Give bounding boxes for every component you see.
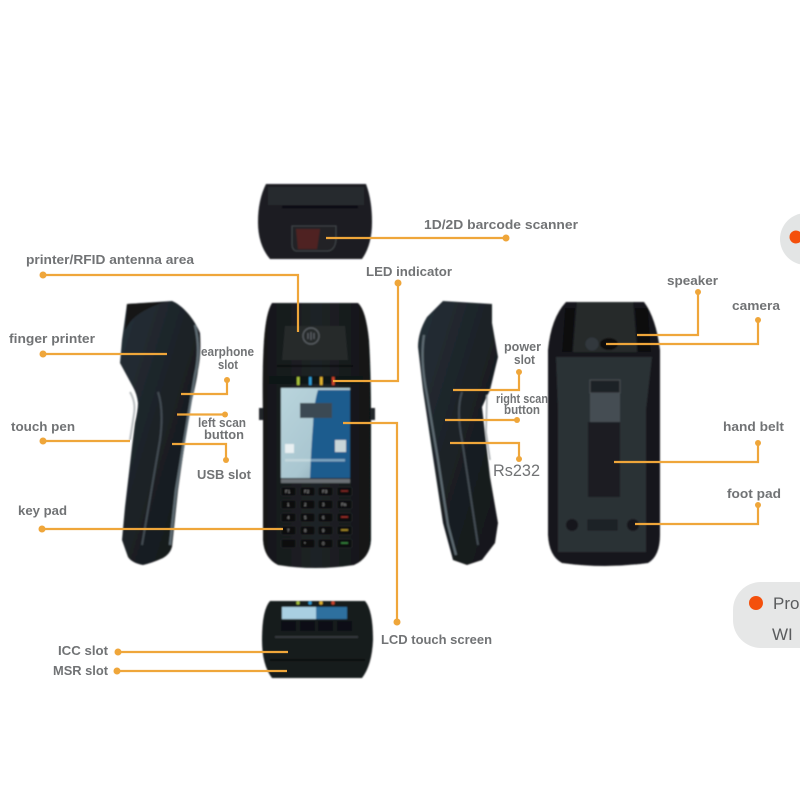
label: touch pen: touch pen [11,420,75,434]
label: 1D/2D barcode scanner: 1D/2D barcode scanner [424,218,578,232]
label: Rs232: Rs232 [493,461,540,480]
label: LED indicator: LED indicator [366,265,452,279]
label: USB slot: USB slot [197,468,252,482]
label: power slot [453,340,541,390]
label: LED indicator [333,265,452,381]
label: left scan button [177,412,246,442]
label: key pad: key pad [18,504,67,518]
label: power slot: power [504,340,541,354]
label: finger printer: finger printer [9,332,95,346]
label: touch pen [11,420,130,444]
device: bottom view [262,601,373,678]
keypad: * [304,541,306,546]
keypad: 5 [304,515,307,520]
label: LCD touch screen: LCD touch screen [381,633,492,647]
device: top view with barcode scanner [258,184,372,259]
device: back view [548,302,660,566]
keypad: 0 [322,541,325,546]
label: right scan button [445,392,548,423]
keypad: 9 [322,528,325,533]
camera lens [586,338,618,350]
label: ICC slot [58,644,288,658]
keypad: 3 [322,502,325,507]
label: ICC slot: ICC slot [58,644,109,658]
label: speaker: speaker [667,274,718,288]
keypad: 2 [304,502,307,507]
label: earphone slot: earphone [201,345,254,359]
label: MSR slot: MSR slot [53,664,109,678]
label: printer/RFID antenna area [26,253,298,332]
label: 1D/2D barcode scanner [326,218,578,242]
label: hand belt: hand belt [723,420,785,434]
keypad: F1 [285,489,291,494]
label: earphone slot: slot [218,358,239,372]
label: earphone slot [181,345,254,394]
label: foot pad: foot pad [727,487,781,501]
icon: NFC contactless symbol [303,328,319,344]
device: left side view [120,301,200,565]
keypad: 8 [304,528,307,533]
LCD screen [281,388,350,478]
keypad: Fn [341,502,347,507]
label: MSR slot [53,664,287,678]
label: printer/RFID antenna area: printer/RFID antenna area [26,253,195,267]
keypad [281,487,352,548]
keypad: 4 [287,515,290,520]
label: foot pad [635,487,781,524]
keypad: 6 [322,515,325,520]
cropped pill: bottom right: WI [772,625,793,644]
cropped pill: top right [780,213,800,265]
label: camera: camera [732,299,781,313]
label: LCD touch screen [343,423,492,647]
keypad: 7 [287,528,290,533]
label: Rs232 [450,443,540,480]
label: key pad [18,504,283,532]
label: finger printer [9,332,167,358]
keypad: F3 [322,489,328,494]
label: power slot: slot [514,353,536,367]
cropped pill: bottom right: Pro [773,594,799,613]
label: hand belt [614,420,785,462]
keypad: 1 [287,502,290,507]
label: camera [606,299,781,344]
label: speaker [637,274,718,335]
keypad: F2 [304,489,310,494]
cropped pill: bottom right [733,582,800,648]
label: left scan button: left scan [198,416,246,430]
label: USB slot [172,444,252,482]
device: right side view [418,301,498,565]
label: right scan button: button [504,403,540,417]
label: left scan button: button [204,428,244,442]
device: front view [259,303,375,568]
LED indicators [297,377,334,385]
label: right scan button: right scan [496,392,548,406]
